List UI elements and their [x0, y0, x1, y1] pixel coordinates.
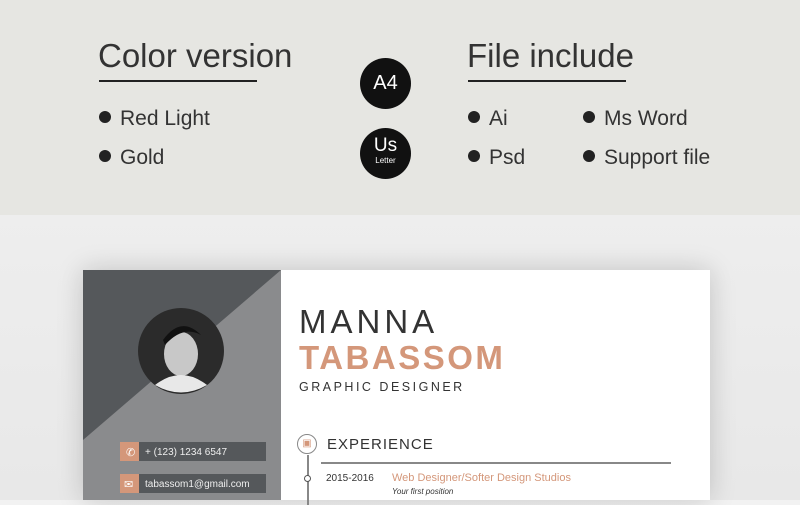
contact: email: tabassom1@gmail.com	[145, 479, 250, 490]
experience section: EXPERIENCE	[327, 436, 434, 453]
name: MANNA	[299, 303, 438, 340]
contact: phone	[120, 442, 266, 461]
list: files	[468, 107, 525, 169]
badge: Us Letter: Us	[374, 135, 397, 156]
badge: A4	[360, 58, 411, 109]
top band: Ms Word	[604, 107, 688, 130]
resume card	[83, 270, 710, 500]
experience section	[297, 434, 671, 505]
list: colors: Red Light	[120, 107, 210, 130]
list: colors: Gold	[120, 146, 164, 169]
experience section: Your first position	[392, 487, 453, 496]
resume card: TABASSOM	[299, 339, 505, 376]
badge: Us Letter	[360, 128, 411, 179]
job title: GRAPHIC DESIGNER	[299, 380, 465, 394]
top band: Support file	[604, 146, 710, 169]
contact: phone: ✆	[126, 447, 135, 459]
photo	[138, 308, 224, 394]
list: colors	[99, 107, 210, 169]
heading: color version: Color version	[98, 37, 292, 74]
list: files: Psd	[489, 146, 525, 169]
heading: file include: File include	[467, 37, 634, 74]
badge: Us Letter: Letter	[375, 156, 396, 165]
list: files: Ai	[489, 107, 508, 130]
contact: phone: + (123) 1234 6547	[145, 447, 227, 458]
experience section: 2015-2016	[326, 473, 374, 484]
experience section: ▣	[302, 438, 312, 449]
badge: A4: A4	[373, 72, 398, 94]
contact: email	[120, 474, 266, 493]
experience section: Web Designer/Softer Design Studios	[392, 472, 571, 484]
contact: email: ✉	[124, 479, 133, 491]
sidebar	[83, 270, 281, 500]
top band	[0, 0, 800, 215]
